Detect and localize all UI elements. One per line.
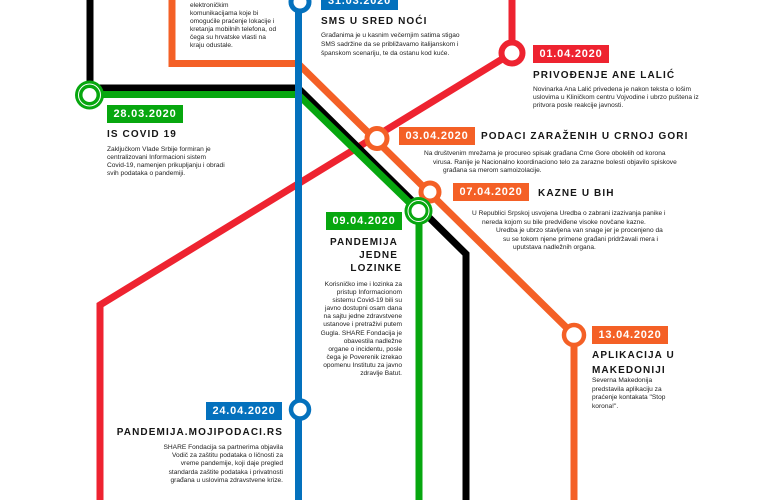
text: Aplikacija u Makedoniji: praćenje kontakata "Stop: [592, 394, 665, 401]
date badge: 07.04.2020: 07.04.2020: [459, 186, 523, 198]
text: pandemija.mojipodaci.rs: SHARE Fondacija sa partnerima objavila: [164, 444, 283, 451]
text: Pandemija jedne lozinke: Korisničko ime i lozinka za: [325, 281, 402, 288]
station: 24.04.2020: [291, 400, 309, 418]
text: electronic communications: kraju odustale.: [190, 42, 233, 49]
text: pandemija.mojipodaci.rs: standarda zaštite podataka i privatnosti: [169, 469, 283, 476]
text: electronic communications: elektroničkim: [190, 2, 228, 9]
date badge: 24.04.2020: 24.04.2020: [212, 405, 276, 417]
date badge: 09.04.2020: [326, 212, 402, 230]
text: IS Covid 19: Covid-19, namenjen prikupljanju i obradi: [107, 162, 225, 169]
text: Pandemija jedne lozinke: na sajtu jedne zdravstvene: [324, 313, 402, 320]
text: electronic communications: kretanja mobilnih telefona, od: [190, 26, 276, 33]
text: Ana Lalić: pritvora posle reakcije javnosti.: [533, 102, 623, 109]
heading: Pandemija jedne lozinke: PANDEMIJA: [330, 236, 398, 248]
orange line: [172, 0, 574, 500]
text: Crna Gora: [424, 150, 677, 174]
blue line: [295, 0, 302, 500]
text: SMS: Građanima je u kasnim večernjim satima stigao: [321, 32, 460, 39]
black line: [90, 0, 466, 500]
date badge: 28.03.2020: [107, 105, 183, 123]
green line: [90, 94, 419, 500]
station: 31.03.2020: [291, 0, 309, 11]
text: Pandemija jedne lozinke: organe o incidentu, posle: [328, 346, 402, 353]
text: electronic communications: komunikacijama koje bi: [190, 10, 258, 17]
text: IS Covid 19: svih podataka o pandemiji.: [107, 170, 185, 177]
text: SMS: španskom scenariju, te da ostanu kod kuće.: [321, 50, 449, 57]
text: pandemija.mojipodaci.rs: vreme pandemije, koji daje pregled: [181, 460, 283, 467]
text: electronic communications: [190, 2, 276, 49]
text: electronic communications: čega su hrvatske vlasti na: [190, 34, 266, 41]
text: IS Covid 19: centralizovani Informacioni sistem: [107, 154, 206, 161]
text: Ana Lalić: Novinarka Ana Lalić privedena je nakon teksta o lošim: [533, 86, 691, 93]
text: Aplikacija u Makedoniji: korona!".: [592, 403, 618, 410]
text: pandemija.mojipodaci.rs: Vodič za zaštitu podataka o ličnosti za: [172, 452, 283, 459]
station: 09.04.2020: [404, 197, 432, 225]
station: 28.03.2020: [75, 80, 104, 110]
text: Crna Gora: virusa. Ranije je Nacionalno koordinaciono telo za zarazne bolesti objavilo spiskove: [433, 158, 677, 166]
text: Aplikacija u Makedoniji: Severna Makedonija: [592, 377, 652, 384]
heading: Aplikacija u Makedoniji: APLIKACIJA U: [592, 350, 675, 361]
text: Pandemija jedne lozinke: sistemu Covid-19 bili su: [332, 297, 402, 304]
text: Pandemija jedne lozinke: javno dostupni osam dana: [325, 305, 402, 312]
text: SMS: [321, 32, 460, 57]
heading: IS Covid 19: IS COVID 19: [107, 129, 177, 140]
date badge: 31.03.2020: [321, 0, 398, 10]
station: 01.04.2020: [502, 42, 522, 64]
date badge: 07.04.2020: [453, 183, 529, 201]
text: Crna Gora: Na društvenim mrežama je procureo spisak građana Crne Gore obolelih od korona: [424, 150, 666, 157]
text: Pandemija jedne lozinke: Gugla. SHARE Fondacija je: [321, 330, 402, 337]
station: 07.04.2020: [421, 183, 439, 201]
date badge: 09.04.2020: 09.04.2020: [332, 215, 396, 227]
text: Ana Lalić: uslovima u Kliničkom centru Vojvodine i ubrzo puštena iz: [533, 94, 699, 101]
heading: Podaci zaraženih u Crnoj Gori: PODACI ZARAŽENIH U CRNOJ GORI: [481, 131, 688, 142]
text: Kazne u BiH: [472, 210, 666, 251]
text: Kazne u BiH: uputstava nadležnih organa.: [513, 244, 596, 251]
text: Pandemija jedne lozinke: ustanove i pretraživi putem: [323, 321, 402, 328]
heading: Privođenje Ane Lalić: PRIVOĐENJE ANE LALIĆ: [533, 70, 675, 81]
text: Ana Lalić: [533, 86, 699, 109]
text: Pandemija jedne lozinke: [320, 281, 402, 377]
text: pandemija.mojipodaci.rs: [164, 444, 284, 484]
text: pandemija.mojipodaci.rs: građana u uslovima zdravstvene krize.: [170, 477, 283, 484]
text: Kazne u BiH: nereda kojom su bile predviđene visoke novčane kazne.: [482, 218, 646, 226]
text: Pandemija jedne lozinke: obavestila nadležne: [344, 338, 402, 345]
text: Pandemija jedne lozinke: opomenu Institutu za javno: [323, 362, 402, 369]
heading: Kazne u BiH: KAZNE U BIH: [538, 188, 615, 199]
date badge: 03.04.2020: 03.04.2020: [405, 130, 469, 142]
station: 13.04.2020: [564, 325, 584, 345]
date badge: 28.03.2020: 28.03.2020: [113, 108, 177, 120]
heading: Pandemija jedne lozinke: JEDNE: [359, 250, 398, 260]
heading: Pandemija jedne lozinke: [330, 236, 402, 274]
text: Crna Gora: građana sa merom samoizolacije.: [443, 167, 542, 174]
text: Pandemija jedne lozinke: pristup Informacionom: [337, 289, 402, 296]
text: Kazne u BiH: Uredba je ubrzo stavljena van snage jer je procenjeno da: [496, 227, 663, 234]
date badge: 13.04.2020: [592, 326, 668, 344]
text: SMS: SMS sadržine da se približavamo italijanskom i: [321, 41, 458, 48]
text: Kazne u BiH: U Republici Srpskoj usvojena Uredba o zabrani izazivanja panike i: [472, 210, 666, 217]
text: Aplikacija u Makedoniji: [592, 377, 666, 410]
heading: SMS u sred noći: SMS U SRED NOĆI: [321, 16, 428, 27]
heading: Aplikacija u Makedoniji: [592, 350, 675, 376]
date badge: 24.04.2020: [206, 402, 282, 420]
heading: pandemija.mojipodaci.rs: PANDEMIJA.MOJIPODACI.RS: [117, 427, 283, 438]
red line: [100, 0, 512, 500]
text: Pandemija jedne lozinke: čega je Poverenik izrekao: [326, 354, 402, 361]
date badge: 03.04.2020: [399, 127, 475, 145]
text: electronic communications: omogućile praćenje lokacije i: [190, 18, 274, 25]
text: Kazne u BiH: su se tokom njene primene građani pridržavali mera i: [503, 236, 658, 242]
date badge: 01.04.2020: [533, 45, 609, 63]
text: Pandemija jedne lozinke: zdravlje Batut.: [360, 370, 402, 377]
date badge: 13.04.2020: 13.04.2020: [598, 329, 662, 341]
text: IS Covid 19: Zaključkom Vlade Srbije formiran je: [107, 146, 211, 152]
text: IS Covid 19: [107, 146, 225, 177]
heading: Pandemija jedne lozinke: LOZINKE: [350, 262, 402, 274]
heading: Aplikacija u Makedoniji: MAKEDONIJI: [592, 364, 666, 376]
date badge: 01.04.2020: 01.04.2020: [539, 48, 603, 60]
station: 03.04.2020: [367, 128, 387, 148]
text: Aplikacija u Makedoniji: predstavila aplikaciju za: [592, 386, 662, 393]
